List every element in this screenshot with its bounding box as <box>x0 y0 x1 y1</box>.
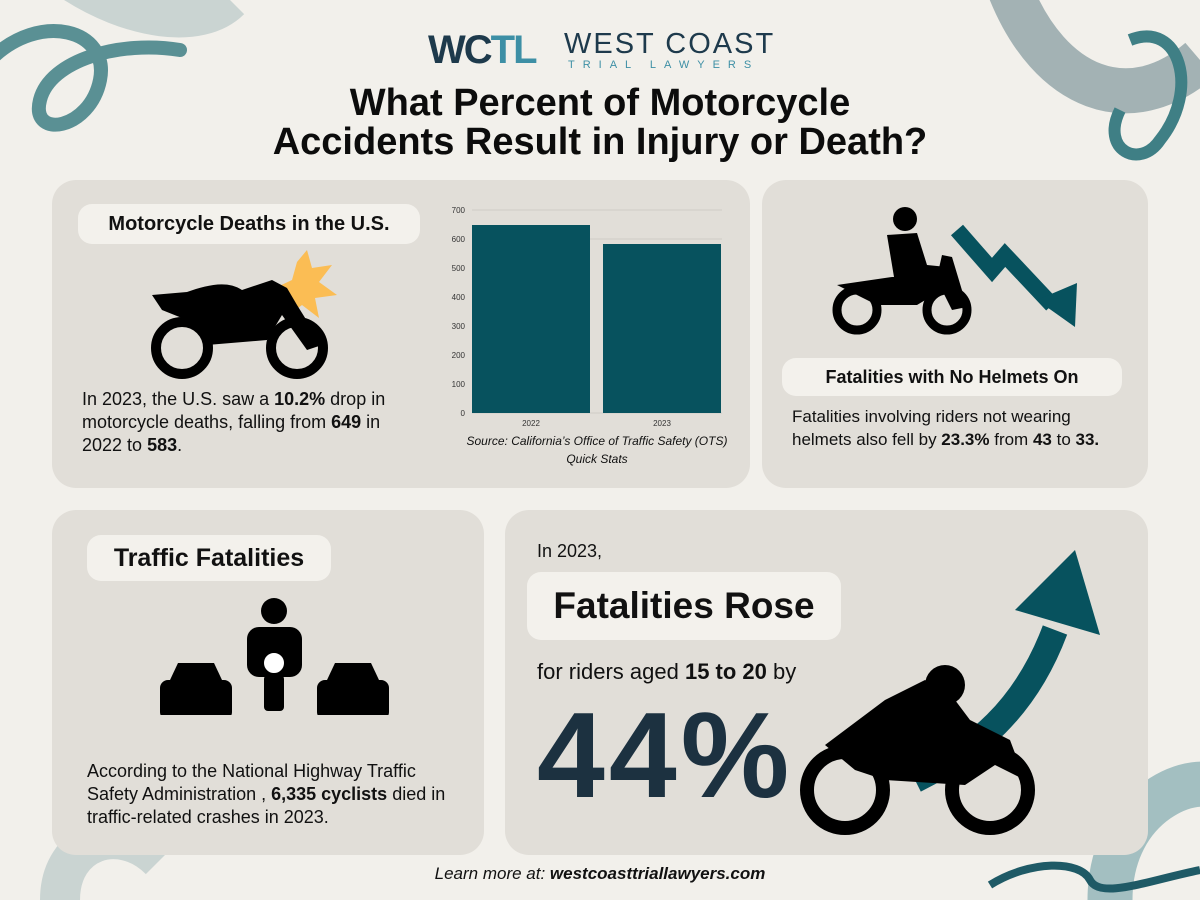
text: 2023 drop: In 2023, the U.S. saw a 10.2% drop in motorcycle deaths, falling from 649 in 2022 to 583. <box>82 389 385 455</box>
heading: Motorcycle Deaths in the U.S. <box>108 213 390 235</box>
bar chart: 2022 <box>522 419 540 428</box>
heading: Fatalities with No Helmets On <box>825 367 1079 387</box>
title: Accidents Result in Injury or Death? <box>273 121 927 163</box>
panel: motorcycle deaths <box>52 180 750 488</box>
heading <box>527 572 841 640</box>
heading <box>78 204 420 244</box>
big stat 44%: 44% <box>537 687 793 823</box>
bar chart <box>452 206 727 466</box>
text: According to the National Highway Traffic Safety Administration , 6,335 cyclists died in traffic-related crashes in 2023. <box>87 761 445 827</box>
footer: Learn more at: westcoasttriallawyers.com <box>435 864 765 883</box>
bar chart: 400 <box>452 293 466 302</box>
icon: motorcycle between cars <box>160 598 389 715</box>
panel: traffic fatalities <box>52 510 484 855</box>
panel: no helmets <box>762 180 1148 488</box>
bar chart: Quick Stats <box>566 452 628 466</box>
title <box>273 82 927 163</box>
bar chart: 300 <box>452 322 466 331</box>
icon: rider with down arrow <box>832 207 1077 334</box>
heading <box>87 535 331 581</box>
logo: TRIAL LAWYERS <box>568 59 759 71</box>
panel: fatalities rose <box>505 510 1148 855</box>
bar chart: 0 <box>461 409 466 418</box>
heading: Fatalities Rose <box>553 585 815 626</box>
logo: WCTL <box>428 28 536 72</box>
bar chart: 100 <box>452 380 466 389</box>
heading <box>782 358 1122 396</box>
text: riders aged: for riders aged 15 to 20 by <box>537 659 796 684</box>
icon: sport bike with up arrow <box>800 550 1100 835</box>
text: in 2023: In 2023, <box>537 541 602 561</box>
heading: Traffic Fatalities <box>114 544 304 572</box>
bar chart: 2023 <box>653 419 671 428</box>
title: What Percent of Motorcycle <box>350 82 850 124</box>
logo: WEST COAST <box>564 28 775 60</box>
icon: motorcycle crash <box>151 250 337 379</box>
text: Fatalities involving riders not wearing helmets also fell by 23.3% from 43 to 33. <box>792 407 1099 449</box>
bar chart: 600 <box>452 235 466 244</box>
bar chart: Source: California’s Office of Traffic Safety (OTS) <box>467 434 727 448</box>
logo <box>428 28 775 72</box>
bar chart: 700 <box>452 206 466 215</box>
bar chart: 200 <box>452 351 466 360</box>
bar chart: 500 <box>452 264 466 273</box>
